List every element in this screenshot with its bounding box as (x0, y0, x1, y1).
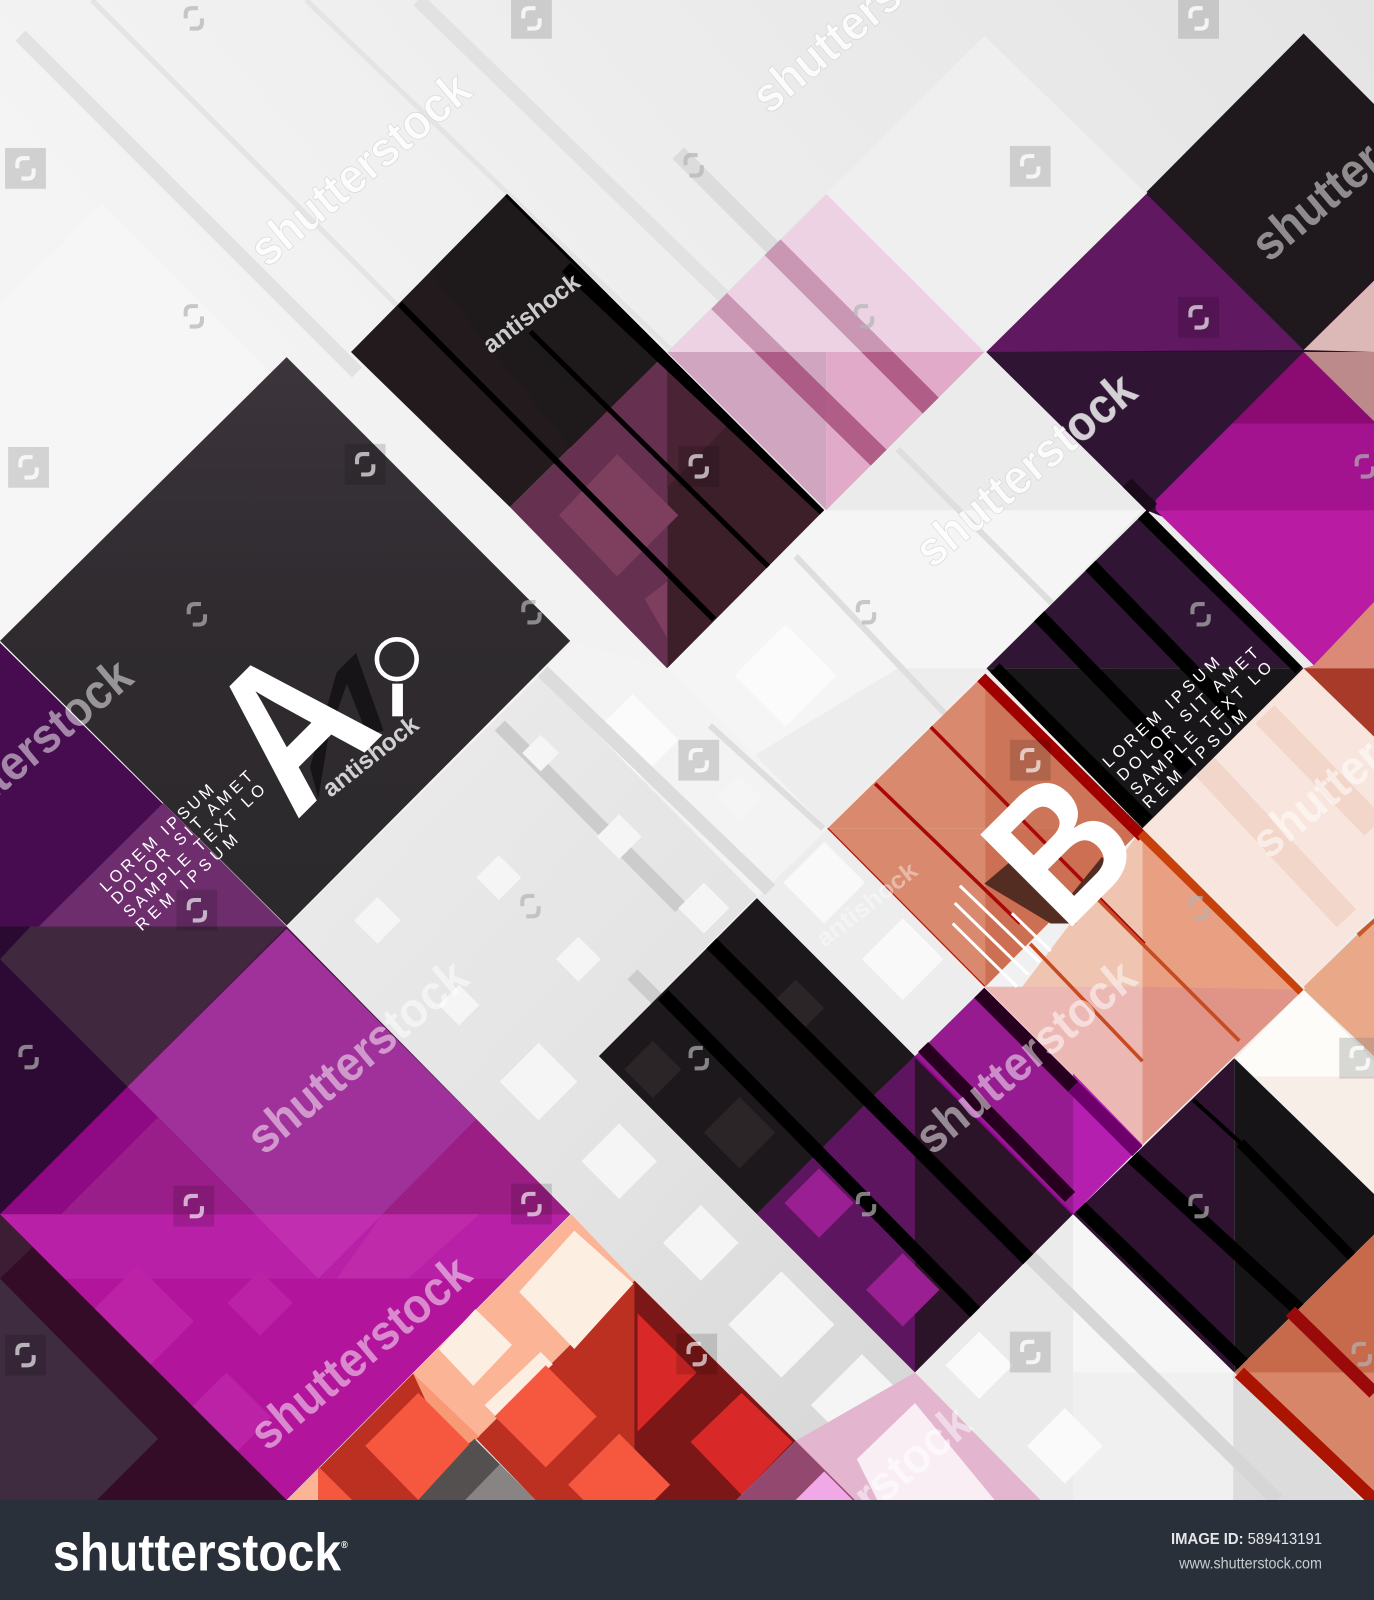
footer image id: IMAGE ID: 589413191 (1171, 1531, 1322, 1548)
panel: dark diamond B (986, 510, 1304, 829)
footer bar (0, 1500, 1374, 1600)
watermarks: shutterstock text: shutterstock (240, 61, 482, 277)
panel: lower dark diamond (599, 898, 1073, 1372)
heading: letter B: B (944, 732, 1175, 963)
panel: grey central band with white squares (287, 671, 1040, 1500)
dark band above diamond B (1127, 483, 1153, 508)
panel: top dark diamond (351, 194, 824, 668)
credit: antishock labels (318, 268, 923, 953)
panel: pink strip bottom (736, 1372, 1040, 1500)
panel: orange and red diamond (288, 1214, 796, 1500)
panel: bottom right white diamond (915, 1214, 1374, 1500)
panel: bottom magenta block (0, 1214, 570, 1500)
watermarks: shutterstock text: shutterstock (240, 1245, 482, 1460)
text block: B sample text: LOREM IPSUM (1099, 654, 1223, 771)
panel: centre white diamond (540, 352, 1142, 898)
panel: dark diamond A (0, 357, 570, 926)
credit: antishock labels: antishock (811, 857, 923, 953)
heading: letter A: A (163, 599, 417, 853)
footer logo: shutterstock (53, 1523, 371, 1582)
panel: light diamond beside B (757, 829, 984, 1056)
credit: antishock labels: antishock (478, 268, 586, 359)
panel: upper right purple block (986, 34, 1374, 737)
panel: orange diamond (827, 673, 1304, 1145)
watermarks: shutterstock text: shutterstock (237, 949, 479, 1165)
panel: peach diamond (1142, 668, 1374, 1194)
icon: letter B shadow (984, 829, 1110, 923)
icon: magnifier (377, 639, 417, 716)
panel: right dark diamond (1073, 1058, 1374, 1372)
watermarks: shutterstock text: shutterstock (905, 362, 1147, 578)
panel: purple diamond (915, 988, 1142, 1214)
credit: antishock labels: antishock (318, 711, 425, 803)
footer logo: ® (341, 1540, 348, 1551)
decoration: white lines (953, 886, 1051, 987)
text block: A sample text: SAMPLE TEXT LO (120, 781, 269, 921)
panel: left purple block (0, 643, 570, 1214)
text block: B sample text: REM IPSUM (1139, 706, 1251, 812)
text block: A sample text: LOREM IPSUM (97, 781, 218, 896)
text block: B sample text: DOLOR SIT AMET (1114, 644, 1262, 785)
panel: pink diamond (667, 194, 984, 510)
text block: A sample text: DOLOR SIT AMET (108, 767, 257, 908)
panel: bottom right red block (1234, 1235, 1374, 1500)
text block: B sample text: SAMPLE TEXT LO (1127, 658, 1276, 799)
icon: letter A shadow (310, 653, 384, 798)
text block: A sample text: REM IPSUM (132, 831, 241, 935)
footer url: www.shutterstock.com (1178, 1555, 1322, 1572)
watermarks: shutterstock text: shutterstock (905, 949, 1147, 1165)
